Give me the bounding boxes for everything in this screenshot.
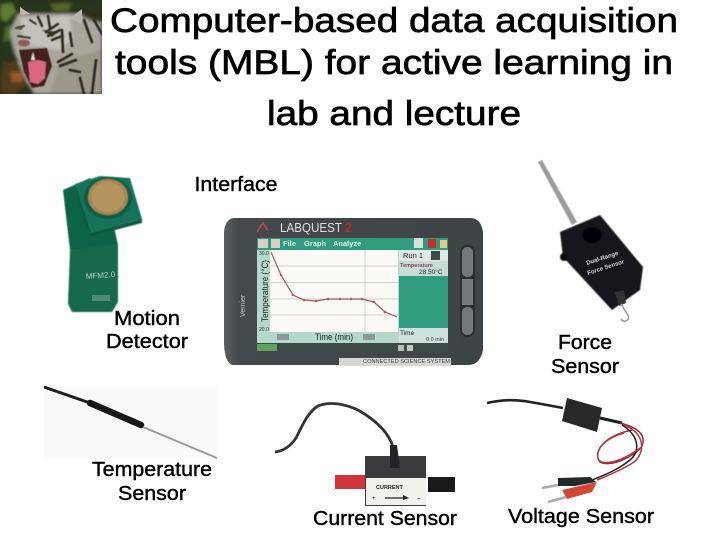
label: force sensor: Sensor bbox=[551, 356, 619, 378]
graph: Temperature (°C) bbox=[260, 260, 270, 322]
screen bbox=[257, 238, 448, 353]
icon: LabQuest 2 interface: CONNECTED SCIENCE SYSTEM bbox=[363, 359, 450, 365]
label: force sensor bbox=[551, 332, 619, 378]
device logo: LABQUEST bbox=[280, 220, 342, 235]
label: voltage sensor: Voltage Sensor bbox=[508, 506, 654, 528]
title: lab and lecture bbox=[267, 95, 521, 133]
icon: temperature sensor bbox=[44, 385, 217, 459]
label: motion detector bbox=[106, 308, 188, 353]
label: force sensor: Force bbox=[558, 332, 612, 354]
tiger mouth bbox=[14, 26, 58, 88]
sensor box bbox=[562, 398, 602, 432]
status bar bbox=[257, 343, 448, 353]
current label plate: – bbox=[417, 496, 421, 502]
icon: motion detector bbox=[63, 176, 142, 312]
vernier logo: Vernier bbox=[240, 294, 247, 317]
icon: force sensor: Dual-Range bbox=[586, 251, 620, 267]
black terminal bbox=[428, 477, 455, 492]
title bbox=[110, 2, 678, 133]
icon: force sensor: Force Sensor bbox=[587, 259, 626, 277]
title: tools (MBL) for active learning in bbox=[115, 44, 673, 82]
icon: tiger photo bbox=[0, 0, 102, 94]
title: Computer-based data acquisition bbox=[110, 2, 678, 40]
black cable bbox=[487, 400, 563, 408]
label: temperature sensor: Temperature bbox=[92, 459, 212, 481]
label: current sensor: Current Sensor bbox=[313, 508, 457, 530]
lead loop bbox=[592, 423, 643, 480]
side panel: Temperature bbox=[400, 263, 433, 269]
device body bbox=[224, 218, 483, 365]
sensor body bbox=[365, 456, 426, 506]
label: interface: Interface bbox=[194, 174, 278, 196]
label: temperature sensor bbox=[92, 459, 212, 505]
current label plate: CURRENT bbox=[376, 485, 404, 491]
side buttons bbox=[460, 245, 475, 337]
tiger ears bbox=[20, 7, 30, 15]
menu bar bbox=[258, 238, 447, 248]
icon: LabQuest 2 interface bbox=[224, 218, 483, 366]
menu bar: Graph bbox=[304, 239, 327, 248]
graph: 20.0 bbox=[259, 327, 269, 333]
side panel bbox=[399, 250, 448, 343]
label: motion detector: Motion bbox=[114, 308, 180, 330]
current label plate bbox=[366, 478, 426, 505]
icon: voltage sensor bbox=[487, 398, 643, 502]
icon: motion detector: MFM2.0 bbox=[86, 270, 116, 281]
graph: Time (min) bbox=[315, 332, 353, 343]
icon: current sensor bbox=[275, 403, 455, 506]
side panel: Run 1 bbox=[403, 251, 423, 260]
side panel: 0.0 min bbox=[426, 337, 444, 343]
menu bar: Analyze bbox=[333, 239, 361, 248]
label: temperature sensor: Sensor bbox=[118, 483, 186, 505]
alligator clips bbox=[558, 477, 596, 486]
graph bbox=[257, 250, 399, 343]
side panel: 28.50°C bbox=[419, 268, 443, 276]
current label plate: + bbox=[372, 496, 376, 502]
side panel: Time bbox=[400, 330, 415, 337]
menu bar: File bbox=[283, 239, 296, 248]
device logo: 2 bbox=[345, 220, 352, 235]
cable bbox=[275, 403, 393, 452]
icon: force sensor bbox=[538, 160, 643, 321]
red terminal bbox=[335, 475, 365, 489]
graph: 30.0 bbox=[259, 251, 269, 257]
label: motion detector: Detector bbox=[106, 331, 188, 353]
